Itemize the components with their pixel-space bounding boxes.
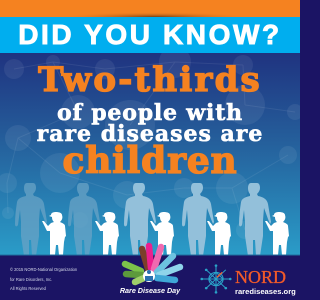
- rare disease day caption: Rare Disease Day: [120, 286, 180, 295]
- copyright: [10, 267, 77, 291]
- copyright: All Rights Reserved: [10, 286, 46, 291]
- child silhouettes: [42, 212, 289, 255]
- nord wordmark: NORD: [235, 267, 286, 287]
- banner: did you know: DID YOU KNOW?: [18, 19, 282, 50]
- adult silhouettes: [15, 183, 271, 256]
- of people with: of people with: [57, 100, 243, 126]
- copyright: for Rare Disorders, Inc.: [10, 277, 52, 282]
- nord network icon: [200, 264, 232, 294]
- two-thirds: Two-thirds: [38, 60, 262, 100]
- children: children: [62, 140, 238, 182]
- nord url: rarediseases.org: [235, 287, 296, 296]
- headline: [36, 60, 263, 182]
- rare diseases are: rare diseases are: [37, 121, 263, 147]
- rare disease day logo: [122, 242, 184, 286]
- copyright: © 2015 NORD-National Organization: [10, 267, 77, 272]
